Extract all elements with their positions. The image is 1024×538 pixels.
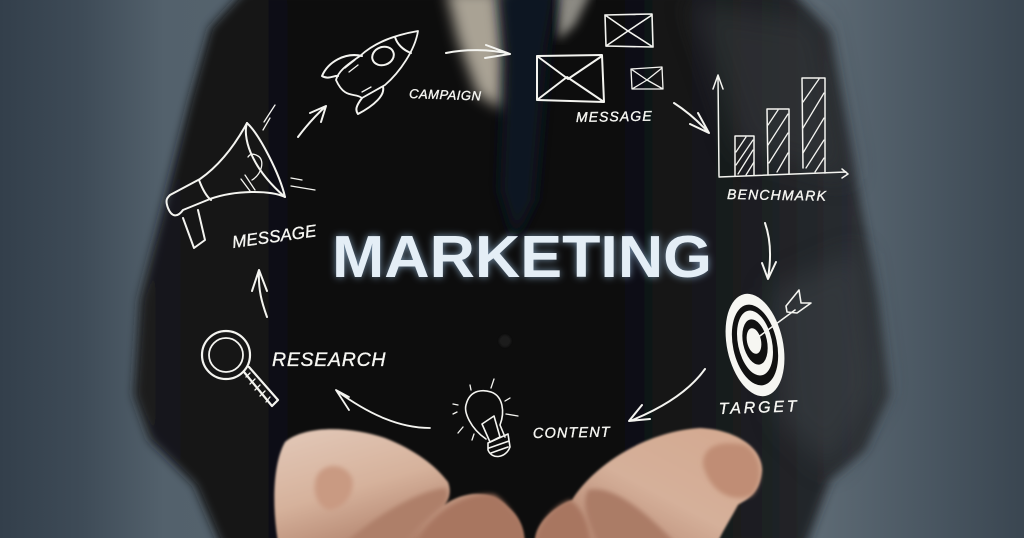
right hand bbox=[535, 428, 762, 538]
right thumb bbox=[703, 443, 760, 498]
photo: businessman in dark suit bbox=[134, 0, 889, 538]
suit jacket bbox=[134, 0, 889, 538]
jacket button bbox=[499, 335, 511, 347]
left thumb bbox=[315, 466, 353, 510]
icon: rocket bbox=[322, 31, 418, 114]
label: target: TARGET bbox=[719, 398, 798, 418]
title: MARKETING bbox=[332, 224, 712, 290]
sleeve shading right bbox=[770, 250, 880, 470]
left fingers bbox=[340, 488, 448, 538]
arrow: benchmark to target bbox=[762, 223, 776, 279]
shirt collar bbox=[446, 0, 505, 110]
right fingers bbox=[585, 489, 680, 538]
icon: light bulb bbox=[453, 379, 518, 456]
necktie bbox=[497, 0, 558, 240]
label: message left: MESSAGE bbox=[231, 221, 319, 252]
label: campaign: CAMPAIGN bbox=[409, 86, 482, 104]
arrow: megaphone to rocket bbox=[298, 106, 326, 137]
label: message top: MESSAGE bbox=[576, 108, 653, 125]
shirt right side bbox=[556, 0, 592, 40]
label: content: CONTENT bbox=[533, 425, 611, 442]
icon: megaphone bbox=[167, 105, 315, 248]
label: benchmark: BENCHMARK bbox=[727, 186, 827, 204]
chart: benchmark bars bbox=[713, 75, 848, 178]
icon: magnifying glass bbox=[202, 331, 278, 406]
arrow: content to research bbox=[336, 390, 430, 428]
label: research: RESEARCH bbox=[272, 349, 387, 371]
icon: envelopes bbox=[537, 14, 663, 102]
icon: target bbox=[717, 288, 811, 402]
shoulder shading right bbox=[690, 0, 850, 180]
arrow: target to content bbox=[629, 369, 705, 421]
arrow: campaign to message bbox=[446, 45, 510, 58]
title: MARKETING bbox=[332, 224, 712, 290]
left hand bbox=[274, 429, 524, 538]
arrow: research to message bbox=[252, 270, 267, 317]
arrow: message to benchmark bbox=[674, 103, 709, 133]
